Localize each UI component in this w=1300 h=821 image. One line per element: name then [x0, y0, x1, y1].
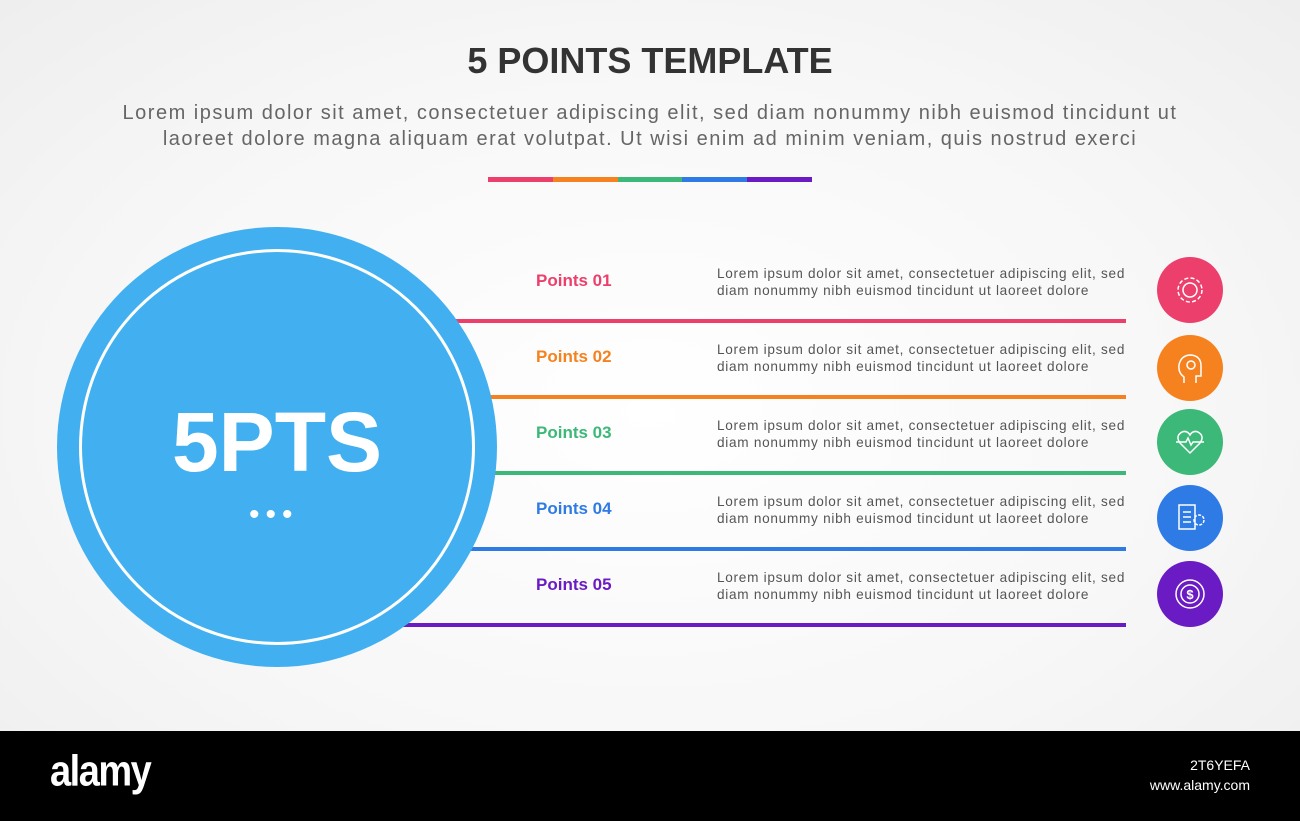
descriptions: [717, 266, 1125, 298]
text: Lorem ipsum dolor sit amet, consectetuer adipiscing elit, sed: [717, 418, 1125, 433]
point labels: Points 01: [536, 271, 612, 290]
footer bar: [0, 731, 1300, 821]
big circle: [57, 227, 497, 667]
subtitle: Lorem ipsum dolor sit amet, consectetuer adipiscing elit, sed diam nonummy nibh euismod tincidunt ut: [123, 102, 1177, 124]
icon: gear: [1157, 257, 1223, 323]
text: Points 03: [536, 423, 612, 442]
footer id: [1150, 757, 1250, 793]
text: Lorem ipsum dolor sit amet, consectetuer adipiscing elit, sed: [717, 494, 1125, 509]
subtitle: [123, 102, 1177, 150]
circle text: 5PTS: [172, 395, 382, 489]
icon: coin: [1157, 561, 1223, 627]
icon: heart: [1157, 409, 1223, 475]
icon: head: [1157, 335, 1223, 401]
subtitle: laoreet dolore magna aliquam erat volutpat. Ut wisi enim ad minim veniam, quis nostrud exerci: [163, 128, 1137, 150]
text: diam nonummy nibh euismod tincidunt ut laoreet dolore: [717, 587, 1089, 602]
text: Points 04: [536, 499, 612, 518]
text: diam nonummy nibh euismod tincidunt ut laoreet dolore: [717, 435, 1089, 450]
text: diam nonummy nibh euismod tincidunt ut laoreet dolore: [717, 511, 1089, 526]
icon: clipboard: [1157, 485, 1223, 551]
footer id: 2T6YEFA: [1190, 757, 1250, 773]
footer logo: alamy: [50, 748, 150, 796]
text: Points 02: [536, 347, 612, 366]
text: Lorem ipsum dolor sit amet, consectetuer adipiscing elit, sed: [717, 342, 1125, 357]
text: diam nonummy nibh euismod tincidunt ut laoreet dolore: [717, 359, 1089, 374]
dots: •••: [249, 498, 299, 531]
lines: [300, 319, 1126, 323]
text: Points 05: [536, 575, 612, 594]
icon: coin: $: [1186, 587, 1194, 602]
color divider: [488, 177, 812, 182]
footer id: www.alamy.com: [1150, 777, 1250, 793]
title: 5 POINTS TEMPLATE: [467, 40, 833, 81]
text: Lorem ipsum dolor sit amet, consectetuer adipiscing elit, sed: [717, 570, 1125, 585]
descriptions: diam nonummy nibh euismod tincidunt ut laoreet dolore: [717, 283, 1089, 298]
descriptions: Lorem ipsum dolor sit amet, consectetuer adipiscing elit, sed: [717, 266, 1125, 281]
